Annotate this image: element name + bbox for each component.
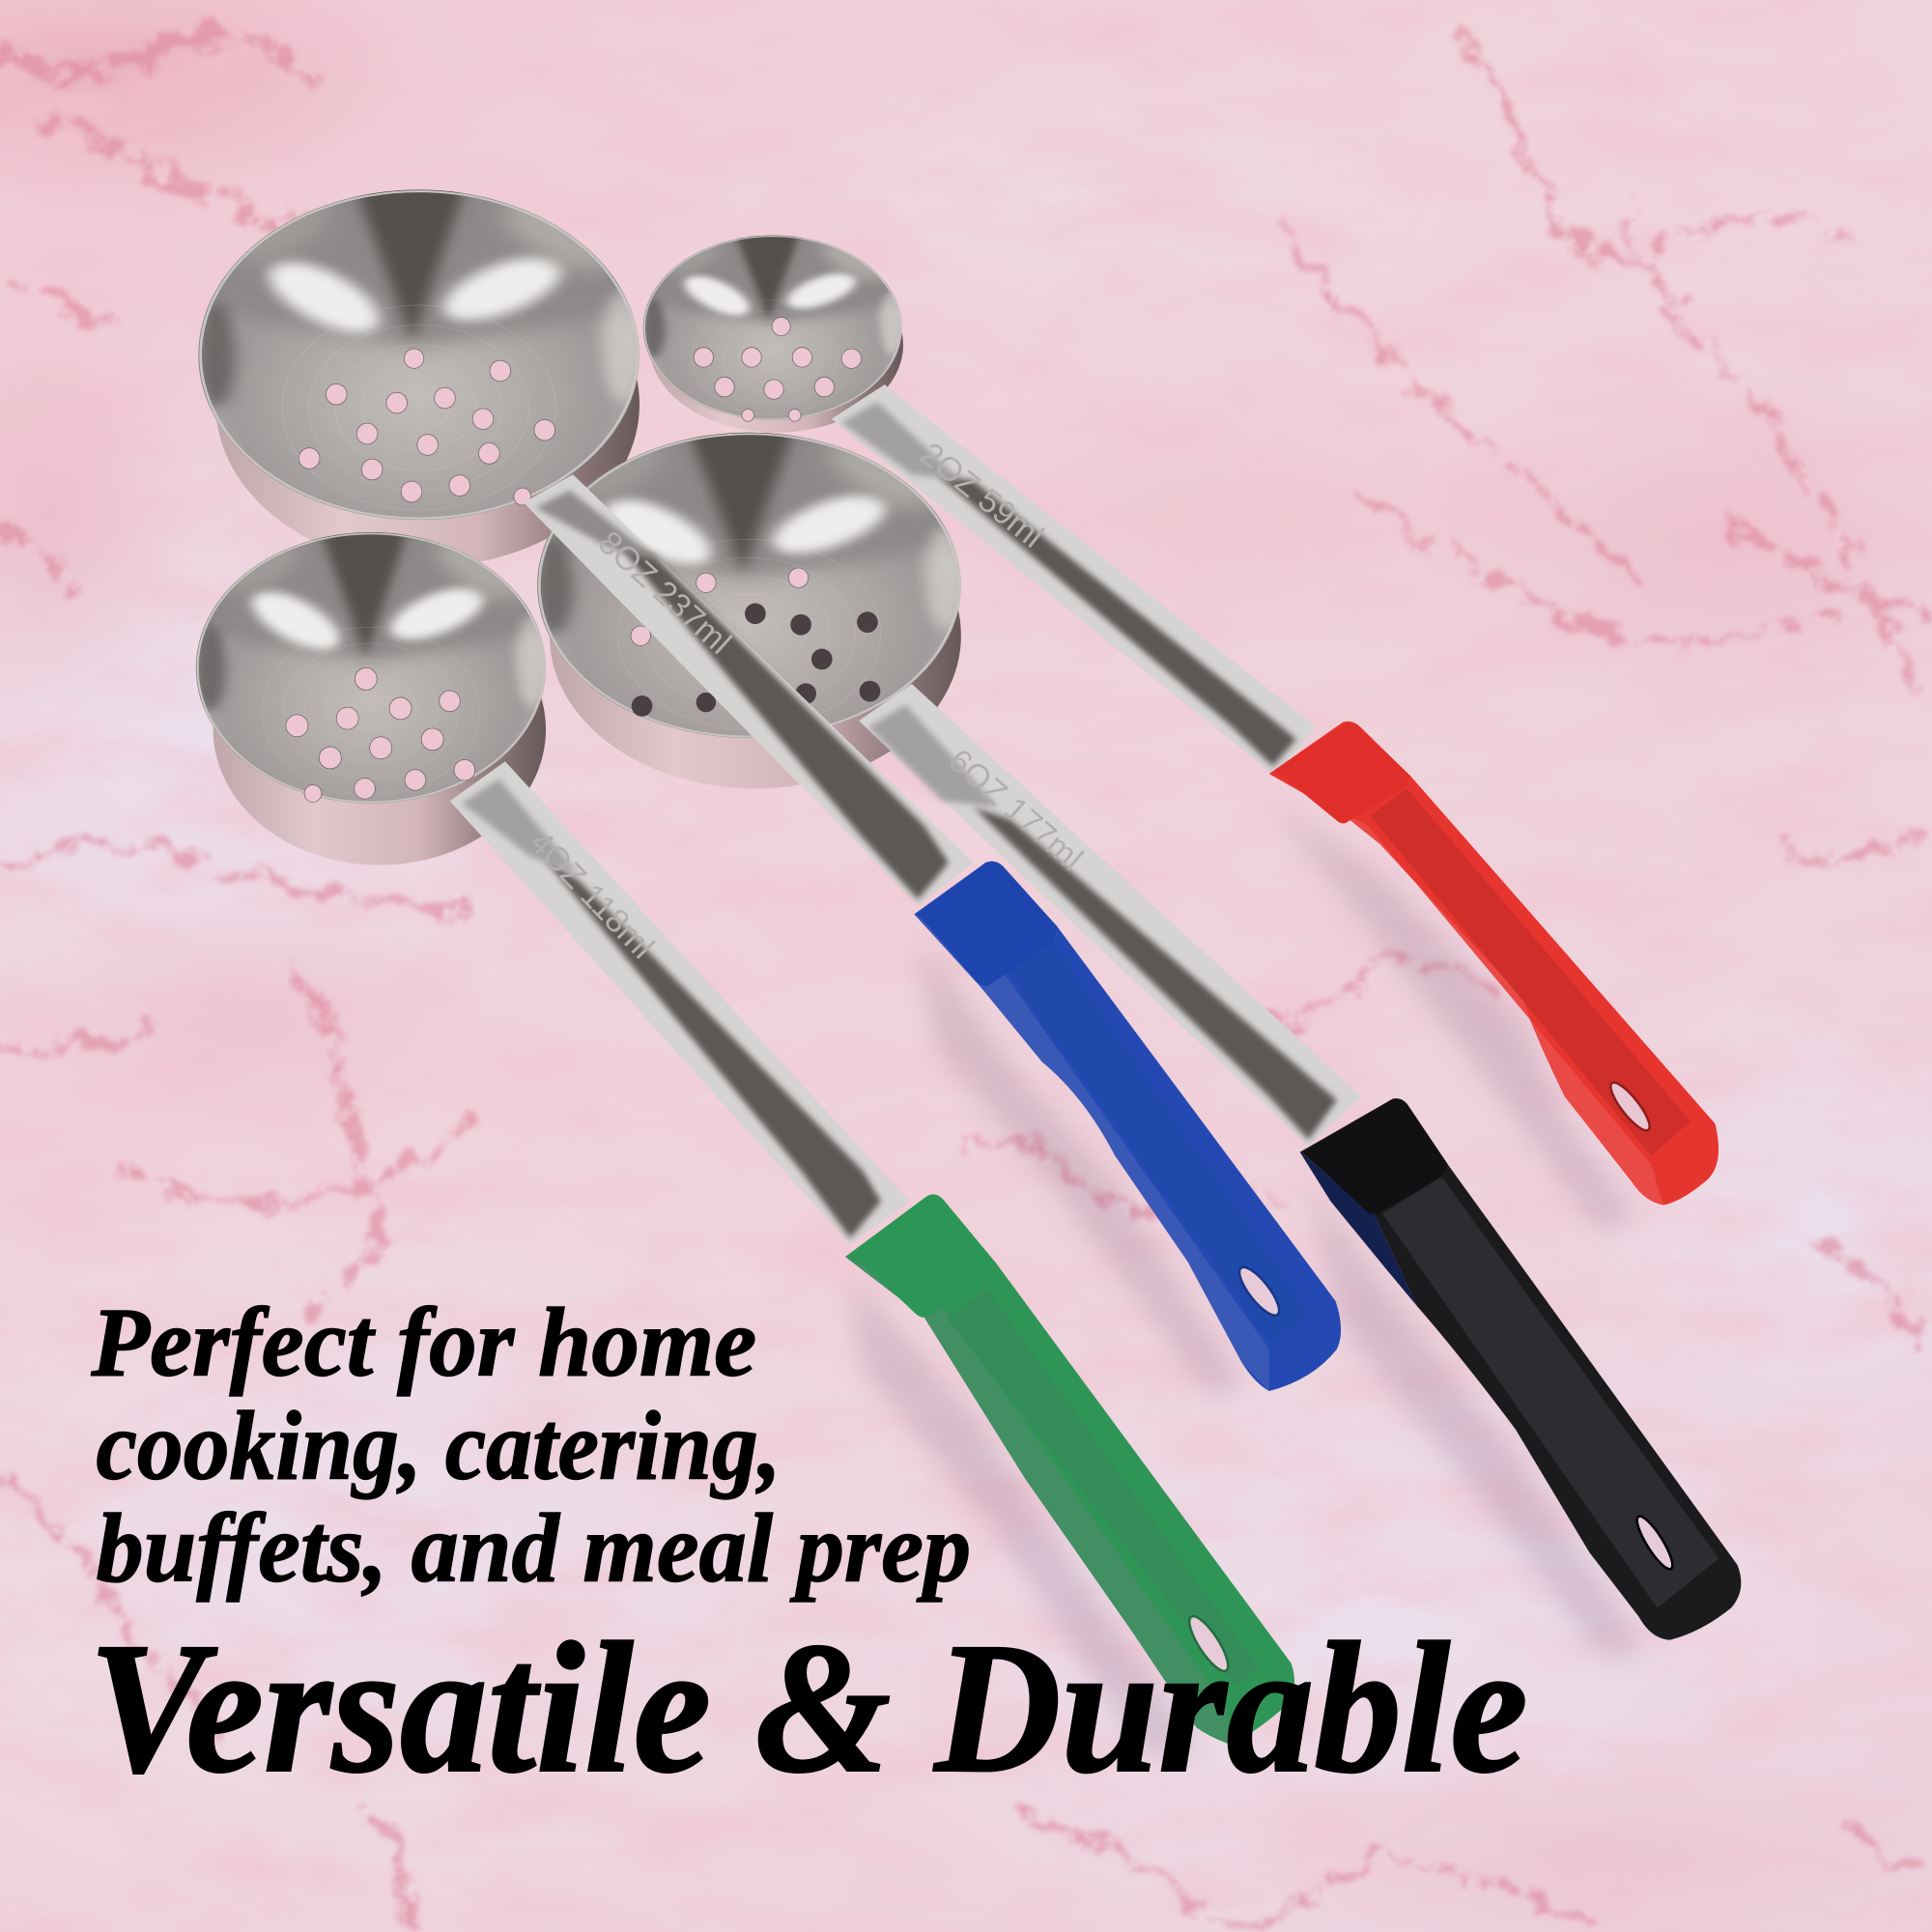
handle: blue, 8 oz [524, 474, 1341, 1391]
text block: usage description: buffets, and meal prep [96, 1493, 971, 1603]
holes: 6 oz [631, 568, 809, 645]
soft shadows under handles [850, 801, 1645, 1756]
handle: green, 4 oz [450, 761, 1294, 1745]
bowl body: 8 oz [215, 242, 639, 567]
ladle: 2 oz small perforated bowl [637, 226, 908, 433]
engraved capacity: 8 oz: 8OZ 237ml [591, 525, 738, 662]
holes: 2 oz [694, 317, 862, 421]
bowl interior: 2 oz [637, 226, 908, 420]
handle: black, 6 oz [859, 684, 1741, 1640]
bowl body: 2 oz [649, 258, 903, 433]
bowl interior: 8 oz [187, 173, 650, 520]
engraved capacity: 6 oz: 6OZ 177ml [941, 742, 1090, 878]
steel shaft: 4 oz [450, 761, 909, 1244]
plastic grip: green [845, 1194, 1294, 1745]
text block: usage description [90, 1288, 971, 1603]
holes: 4 oz [286, 668, 475, 802]
plastic grip: red [1269, 722, 1719, 1205]
steel shaft: 2 oz [832, 384, 1316, 777]
steel shaft: 6 oz [859, 684, 1361, 1146]
headline: Versatile & Durable [89, 1604, 1528, 1811]
bowl body: 4 oz [213, 594, 546, 865]
holes: 8 oz [298, 349, 555, 505]
ladle: 4 oz perforated bowl [187, 519, 554, 865]
text block: usage description: Perfect for home [90, 1288, 756, 1397]
plastic grip: black [1300, 1098, 1741, 1640]
bowl interior: 4 oz [187, 519, 554, 804]
plastic grip: blue [914, 862, 1341, 1391]
handle: red, 2 oz [832, 384, 1719, 1205]
steel shaft: 8 oz [524, 474, 974, 906]
bowl body: 6 oz [550, 483, 961, 788]
engraved capacity: 2 oz: 2OZ 59ml [913, 436, 1050, 555]
engraved capacity: 4 oz: 4OZ 118ml [522, 824, 661, 966]
bowl interior: 6 oz [526, 417, 972, 738]
text block: usage description: cooking, catering, [96, 1392, 781, 1501]
ladle: 8 oz large perforated bowl [187, 173, 650, 567]
ladle: 6 oz medium perforated bowl [526, 417, 972, 788]
